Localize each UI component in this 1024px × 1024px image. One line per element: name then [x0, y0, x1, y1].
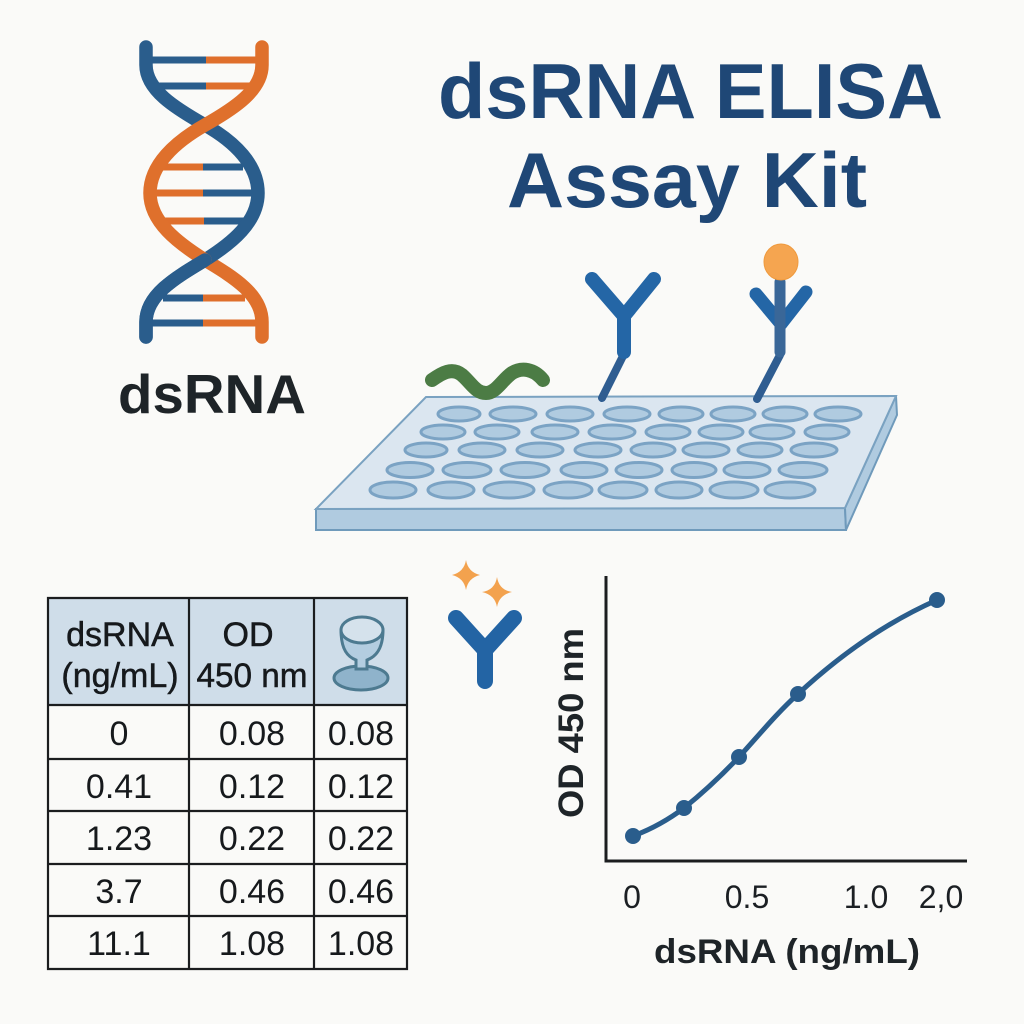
title [438, 47, 943, 224]
table body values: 0 [110, 715, 128, 753]
table body values [86, 715, 394, 963]
x-axis tick labels: 0.5 [725, 879, 769, 915]
table body values: 0.22 [328, 820, 394, 858]
table [48, 598, 407, 969]
icon: dsRNA double helix [146, 47, 262, 337]
table body values: 11.1 [87, 925, 151, 963]
table body values: 0.12 [328, 768, 394, 806]
table header text [61, 616, 308, 695]
plate wells [370, 407, 861, 498]
table header text: dsRNA [66, 616, 174, 654]
icon: goblet well [334, 617, 388, 690]
microplate [316, 396, 897, 530]
table body values: 0.12 [219, 768, 285, 806]
table body values: 1.08 [219, 925, 285, 963]
icon: green dsRNA strand [432, 370, 543, 393]
table body values: 3.7 [95, 873, 143, 911]
x-axis tick labels: 0 [623, 879, 641, 915]
table header text: OD [222, 616, 274, 654]
title: dsRNA ELISA [438, 47, 943, 135]
heading: dsRNA label: dsRNA [118, 363, 306, 425]
table header text: (ng/mL) [61, 657, 179, 695]
x-axis tick labels [623, 879, 963, 915]
table grid [48, 598, 407, 969]
y-axis title: OD 450 nm [552, 628, 591, 818]
x-axis tick labels: 1.0 [844, 879, 888, 915]
icon: detection antibody with orange label [756, 244, 806, 399]
table body values: 0.46 [328, 873, 394, 911]
chart axes [606, 576, 967, 861]
chart: OD 450 nm standard curve [552, 576, 967, 971]
title: Assay Kit [507, 136, 867, 224]
table header text: 450 nm [196, 657, 308, 695]
table body values: 0.46 [219, 873, 285, 911]
chart points [625, 592, 945, 844]
x-axis title: dsRNA (ng/mL) [654, 933, 920, 971]
table body values: 1.08 [328, 925, 394, 963]
table body values: 0.08 [219, 715, 285, 753]
table body values: 0.08 [328, 715, 394, 753]
table body values: 0.22 [219, 820, 285, 858]
icon: capture antibody [592, 279, 654, 398]
table header fill [48, 598, 407, 705]
chart curve [633, 600, 937, 836]
table body values: 1.23 [86, 820, 152, 858]
table body values: 0.41 [86, 768, 152, 806]
x-axis tick labels: 2,0 [919, 879, 963, 915]
icon: enzyme antibody with sparkles [452, 560, 514, 681]
